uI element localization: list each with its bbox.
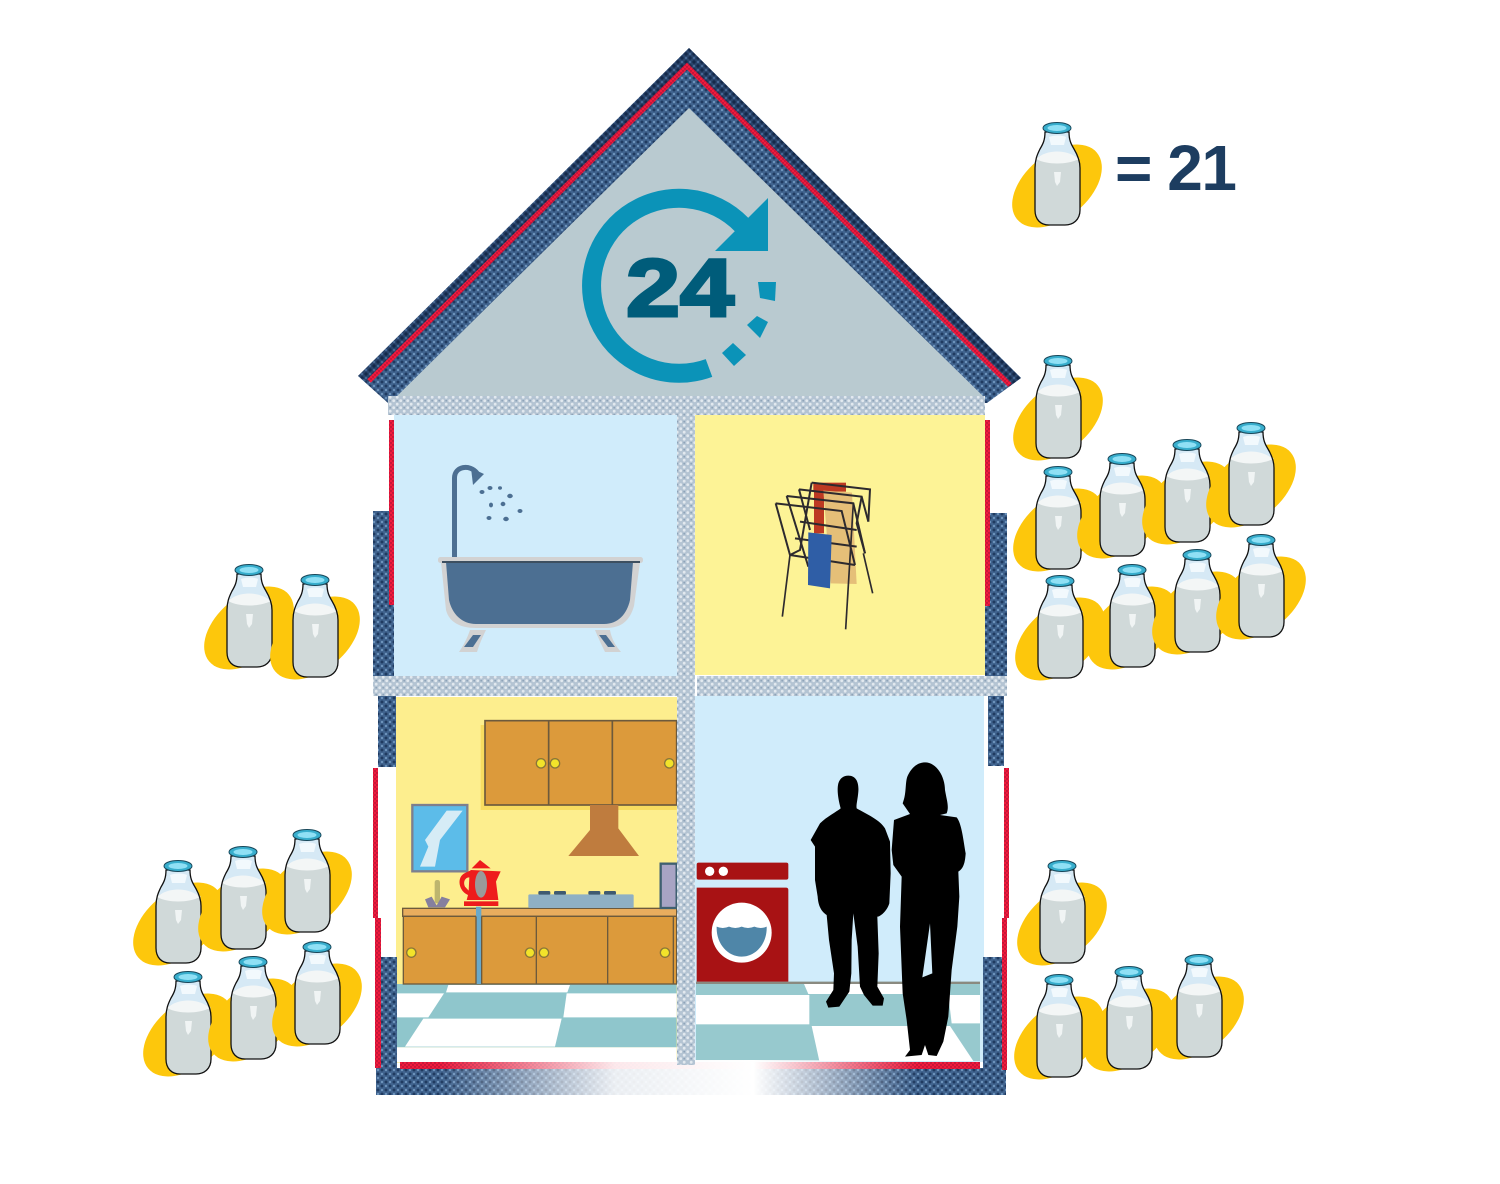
- icon: shower: [454, 467, 522, 557]
- walls: denim insulation: [373, 511, 1007, 1095]
- roof gable: [395, 108, 985, 398]
- base cabinets: [403, 907, 677, 984]
- legend: one bottle equals 21: [997, 122, 1237, 244]
- icon: 24 hour clock arrow: [592, 198, 776, 373]
- bottles: lower left: [118, 830, 377, 1093]
- icon: clothes airer: [776, 483, 873, 629]
- panel: bathroom: [394, 415, 678, 677]
- tap: [425, 880, 450, 907]
- icon: red kettle: [459, 860, 501, 906]
- walls: red insulation lines: [373, 420, 1009, 1070]
- mirror: [412, 805, 467, 871]
- floor tiles: [696, 982, 980, 1061]
- legend value: = 21: [1115, 132, 1237, 204]
- bottles: lower right: [999, 860, 1259, 1096]
- microwave: [661, 864, 677, 908]
- panel: kitchen: [396, 697, 678, 1063]
- hob: [528, 891, 634, 908]
- icon: washing machine: [697, 863, 788, 982]
- cooker hood: [568, 805, 639, 856]
- silhouette: man: [811, 776, 891, 1008]
- icon: bathtub: [438, 557, 643, 652]
- panel: drying room: [695, 415, 985, 675]
- floor tiles: [397, 984, 677, 1062]
- floor fade: [376, 1060, 1006, 1100]
- walls: knit beams: [373, 396, 1007, 1065]
- silhouette: woman: [892, 762, 966, 1057]
- roof: [358, 48, 1021, 403]
- panel: laundry room: [695, 696, 984, 1062]
- bottles: upper left: [189, 564, 375, 696]
- number 24: 24: [626, 243, 734, 334]
- wall cabinets: [481, 721, 677, 810]
- bottles: upper right: [998, 356, 1321, 697]
